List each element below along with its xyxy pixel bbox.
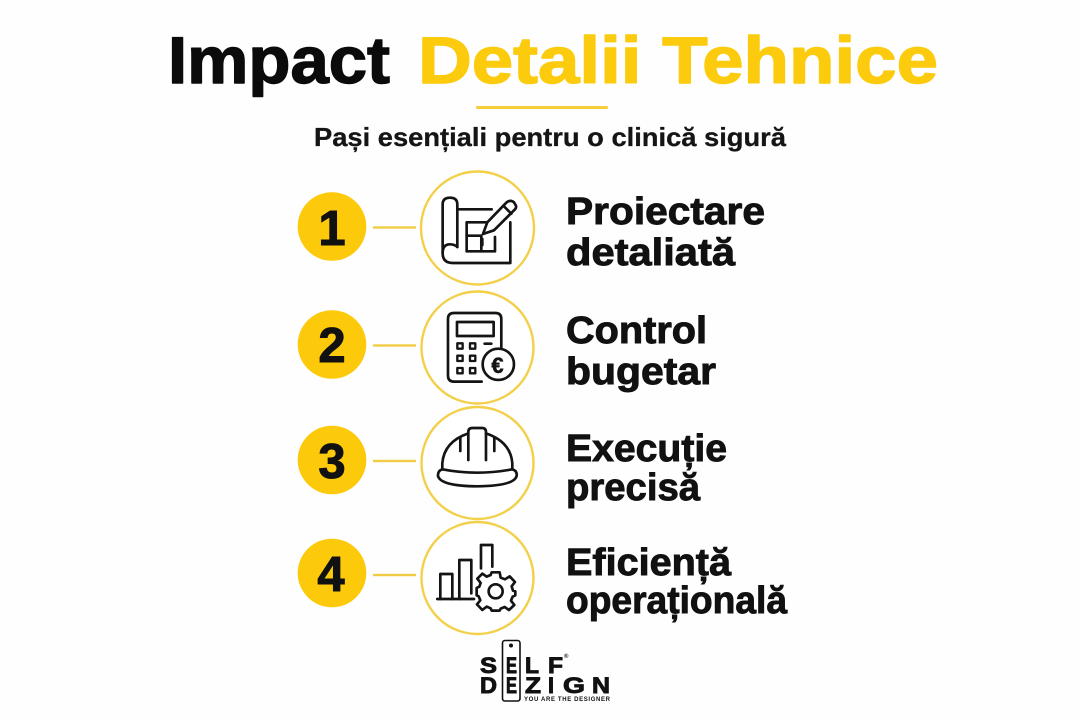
logo tagline: YOU ARE THE DESIGNER <box>524 697 611 703</box>
number badge 3: 3 <box>318 435 346 489</box>
number badge 1 <box>298 192 366 261</box>
logo wordmark: I <box>548 673 554 698</box>
logo wordmark <box>480 653 610 698</box>
number badge 4: 4 <box>317 548 345 602</box>
icon circle: hard hat <box>422 407 534 519</box>
label 3: precisă <box>566 467 701 509</box>
connector 2 <box>373 344 416 347</box>
logo wordmark: E <box>506 653 517 678</box>
connector 3 <box>373 460 416 462</box>
logo wordmark: G <box>563 673 585 698</box>
label 1: Proiectare <box>566 191 765 233</box>
label 2 <box>566 310 716 393</box>
logo wordmark: S <box>480 653 497 678</box>
logo wordmark: L <box>525 653 539 678</box>
connector 4 <box>373 574 416 576</box>
number badge 4 <box>298 539 366 607</box>
logo wordmark: E <box>506 673 517 698</box>
number badge 2 <box>298 310 366 379</box>
icon circle: calculator with euro: € <box>491 353 504 378</box>
title: Detalii Tehnice <box>418 23 938 97</box>
label 4: Eficiență <box>566 542 732 584</box>
title underline <box>476 106 608 109</box>
label 3 <box>566 428 727 509</box>
logo wordmark: D <box>480 673 497 698</box>
subtitle: Pași esențiali pentru o clinică sigură <box>314 122 787 152</box>
icon circle: blueprint and pencil <box>421 172 534 284</box>
title <box>168 23 938 97</box>
label 4: operațională <box>566 580 788 622</box>
label 2: Control <box>566 310 707 352</box>
label 1 <box>566 191 765 274</box>
icon circle: calculator with euro <box>422 292 534 404</box>
step 2: control bugetar <box>298 292 716 404</box>
title: Impact <box>168 23 390 97</box>
step 4: eficiență operațională <box>298 522 788 634</box>
logo ruler <box>502 640 520 701</box>
label 2: bugetar <box>566 351 716 393</box>
logo wordmark: Z <box>525 673 541 698</box>
logo wordmark: F <box>548 653 563 678</box>
number badge 3 <box>298 426 366 494</box>
icon circle: bars and gear <box>422 522 534 634</box>
label 1: detaliată <box>566 232 736 274</box>
step 3: execuție precisă <box>298 407 727 519</box>
logo: Self Dezign <box>480 640 611 703</box>
connector 1 <box>373 226 416 229</box>
number badge 1: 1 <box>318 202 346 256</box>
step 1: proiectare detaliată <box>298 172 765 284</box>
logo registered mark: ® <box>564 653 569 660</box>
number badge 2: 2 <box>318 319 346 373</box>
label 3: Execuție <box>566 428 727 470</box>
logo wordmark: N <box>592 673 610 698</box>
label 4 <box>566 542 788 622</box>
